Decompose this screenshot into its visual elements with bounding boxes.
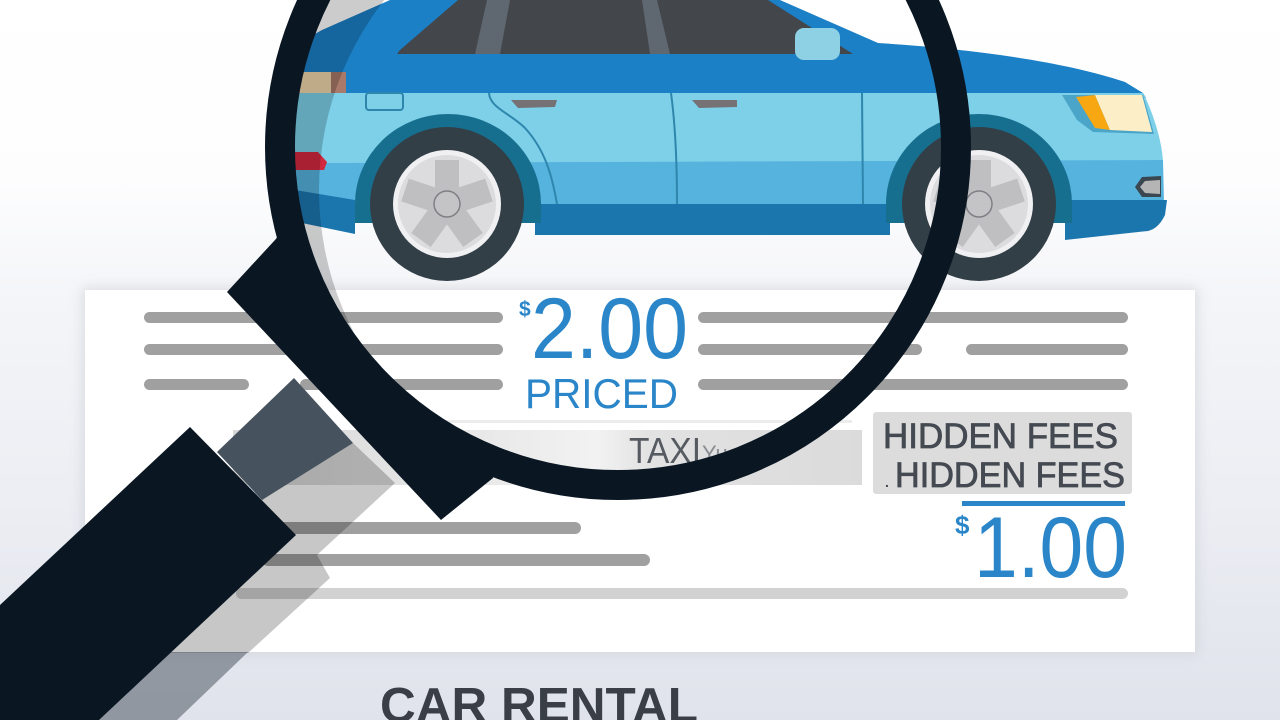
fog light — [1135, 176, 1161, 197]
panel: receipt — [82, 281, 1198, 655]
text lines: right column — [698, 312, 1128, 390]
magnifying glass — [0, 0, 956, 720]
price: $1.00: 1.00 — [974, 500, 1127, 596]
price: $2.00: $ — [519, 298, 531, 321]
side windows — [397, 0, 853, 54]
rear bumper — [295, 190, 355, 234]
taxes row: Yu — [702, 441, 728, 466]
label: priced: PRICED — [525, 370, 678, 417]
handle grip — [0, 427, 296, 720]
lens edge shading — [295, 0, 384, 334]
text lines: bottom — [236, 522, 1128, 599]
tail light — [298, 72, 346, 93]
callout: hidden fees: HIDDEN FEES — [895, 456, 1125, 495]
rear reflector — [294, 152, 327, 170]
lens ring — [280, 0, 956, 485]
front wheel — [886, 114, 1072, 281]
car lower body — [295, 93, 1163, 163]
callout: hidden fees — [873, 412, 1132, 495]
door seams — [366, 93, 863, 204]
sill — [535, 204, 890, 235]
callout: hidden fees: . — [885, 474, 889, 490]
wing mirror — [795, 28, 840, 60]
callout: hidden fees: HIDDEN FEES — [883, 417, 1118, 456]
taxes row: TAXI — [629, 430, 701, 471]
lens collar — [227, 210, 500, 520]
lower door band — [295, 160, 1164, 205]
price: $1.00: $ — [955, 510, 970, 540]
fee rule — [962, 501, 1125, 506]
rear wheel — [355, 114, 541, 281]
illustration: blue car — [294, 0, 1167, 281]
headlight — [1062, 95, 1154, 134]
magnifier shadow — [20, 443, 395, 720]
price: $2.00: 2.00 — [531, 281, 688, 377]
handle shaft — [217, 378, 353, 500]
door handles — [511, 100, 737, 108]
text lines: left column — [144, 312, 503, 390]
car upper body — [295, 0, 1146, 98]
front bumper — [1065, 200, 1167, 240]
taxes row — [233, 430, 862, 485]
